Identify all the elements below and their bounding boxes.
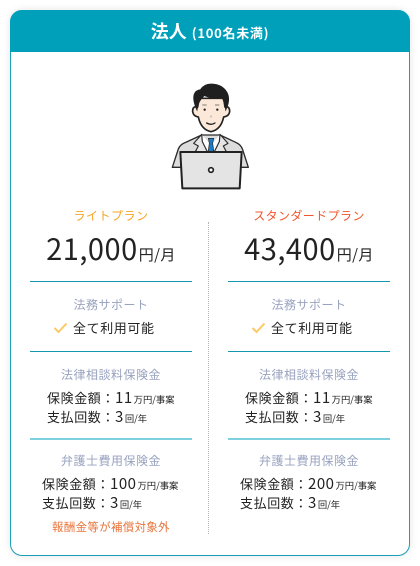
- lawyer fee values: [42, 473, 178, 513]
- price: 21,000円/月: [46, 227, 176, 269]
- face: [193, 98, 230, 132]
- note: 報酬金等が補償対象外: [52, 519, 170, 535]
- header bar: [10, 10, 410, 52]
- lawyer fee values: 支払回数：3回/年: [240, 492, 340, 513]
- consultation fee values: 保険金額：11万円/事案: [47, 387, 175, 408]
- hair: [194, 84, 229, 110]
- legal support heading: 法務サポート: [271, 296, 346, 313]
- jacket: [172, 135, 248, 175]
- plan name: スタンダードプラン: [253, 207, 365, 224]
- legal support value: 全て利用可能: [271, 318, 353, 337]
- legal support heading: 法務サポート: [73, 296, 148, 313]
- consultation fee values: 保険金額：11万円/事案: [245, 387, 373, 408]
- column divider: [208, 222, 209, 534]
- header bar: 法人 (100名未満): [151, 18, 269, 44]
- mouth: [207, 123, 215, 124]
- lapels: [194, 134, 208, 155]
- consultation fee values: 支払回数：3回/年: [245, 406, 345, 427]
- consultation fee heading: 法律相談料保険金: [259, 366, 359, 383]
- laptop: [180, 152, 242, 188]
- plan name: ライトプラン: [73, 207, 148, 224]
- tie: [208, 138, 214, 155]
- panel: light plan: [30, 207, 192, 535]
- lawyer fee values: 保険金額：100万円/事案: [42, 473, 178, 494]
- consultation fee values: 支払回数：3回/年: [47, 406, 147, 427]
- lawyer fee heading: 弁護士費用保険金: [61, 452, 161, 469]
- icon: businessman with laptop: [172, 84, 249, 190]
- lawyer fee heading: 弁護士費用保険金: [259, 452, 359, 469]
- price: 43,400円/月: [244, 227, 374, 269]
- lawyer fee values: 保険金額：200万円/事案: [240, 473, 376, 494]
- panel: standard plan: [228, 207, 390, 513]
- consultation fee values: [47, 387, 175, 427]
- shirt: [198, 134, 223, 155]
- consultation fee values: [245, 387, 373, 427]
- lawyer fee values: 支払回数：3回/年: [42, 492, 142, 513]
- eyes and brows: [204, 108, 206, 111]
- consultation fee heading: 法律相談料保険金: [61, 366, 161, 383]
- legal support value: 全て利用可能: [73, 318, 155, 337]
- lawyer fee values: [240, 473, 376, 513]
